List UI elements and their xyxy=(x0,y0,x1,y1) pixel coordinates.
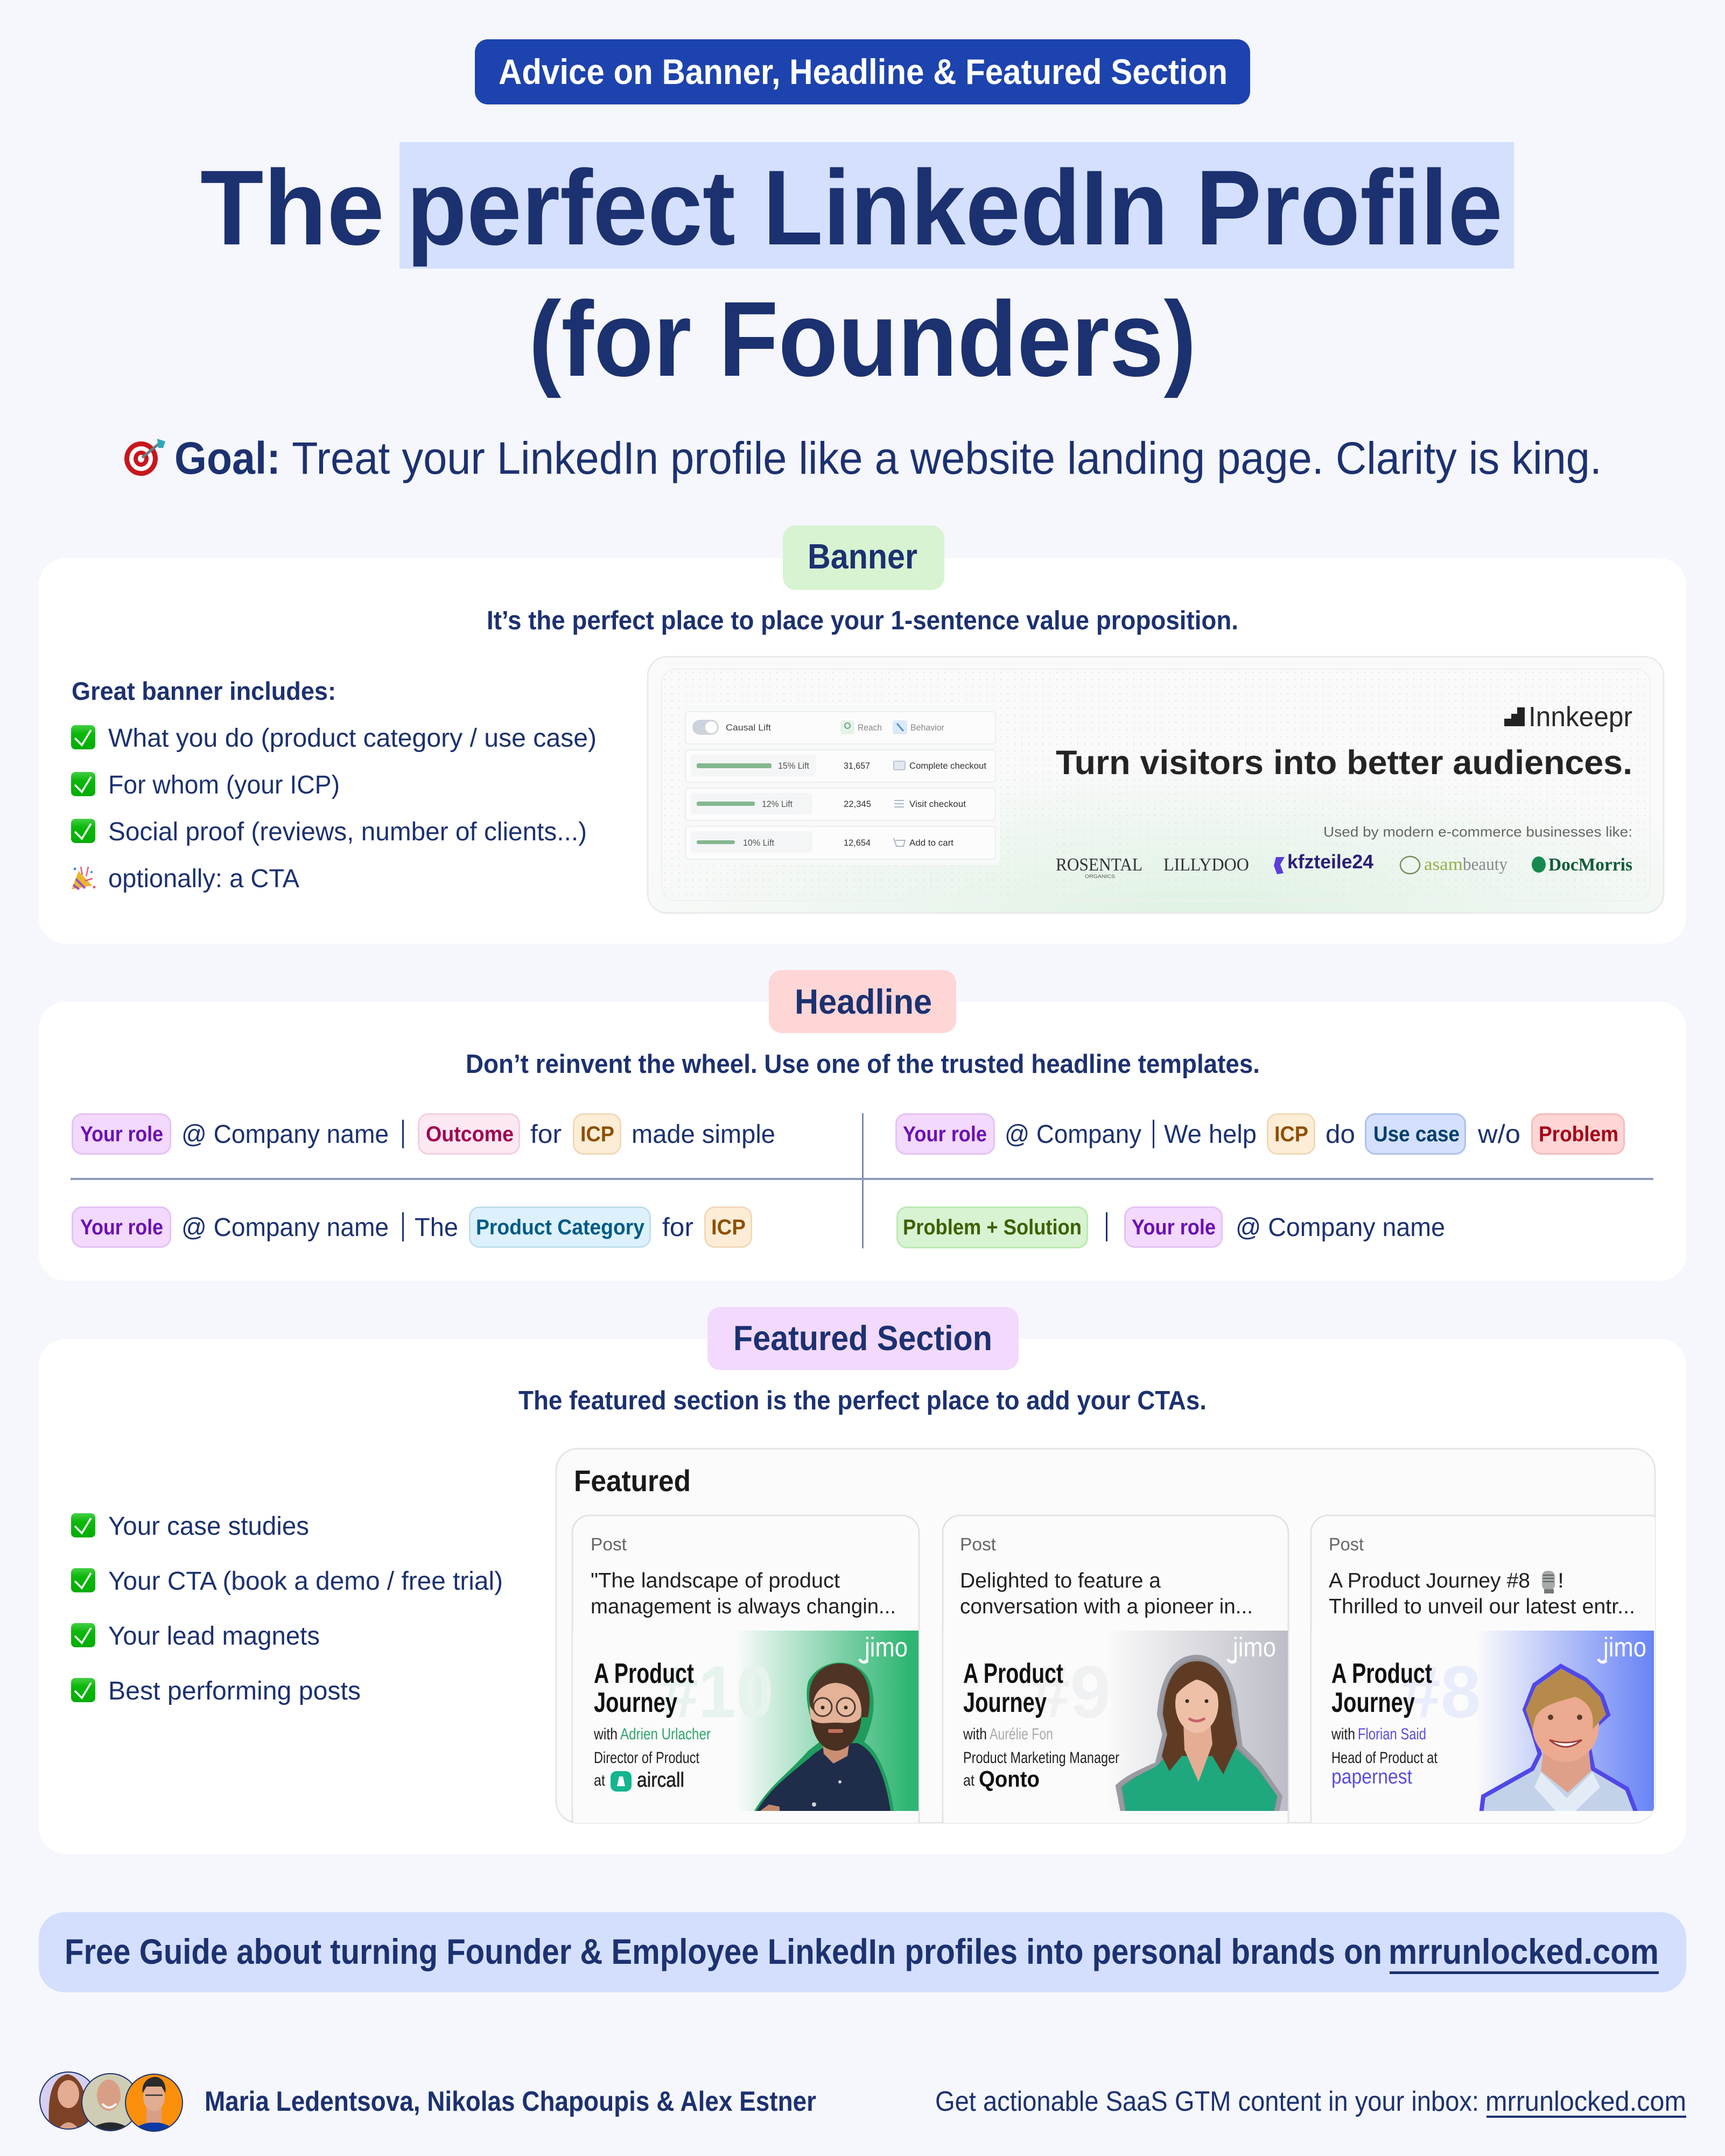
heading: headline xyxy=(769,970,956,1033)
post image 3 xyxy=(1312,1631,1654,1814)
template 2: We help xyxy=(1164,1120,1257,1149)
template 3 xyxy=(72,1207,752,1247)
footer xyxy=(38,2070,1686,2132)
call to action banner xyxy=(39,1912,1686,1992)
post image 2: Journey xyxy=(963,1687,1047,1718)
item: for whom: For whom (your ICP) xyxy=(108,771,340,799)
featured subtitle: The featured section is the perfect place to add your CTAs. xyxy=(518,1386,1207,1415)
table row: complete checkout xyxy=(685,750,995,782)
post image 1: Journey xyxy=(594,1687,677,1718)
portrait 1 xyxy=(755,1663,892,1814)
table row: visit checkout: Visit checkout xyxy=(909,799,966,809)
customer logos: kfzteile24 xyxy=(1287,851,1373,873)
post card 1: management is always changin... xyxy=(591,1595,896,1618)
aircall logo: aircall xyxy=(637,1769,684,1792)
post image 2: #9 xyxy=(1029,1651,1111,1733)
table row: add to cart: Add to cart xyxy=(909,838,953,848)
qonto logo: Qonto xyxy=(979,1766,1040,1792)
template 1: for xyxy=(530,1120,562,1149)
table header row: Causal Lift xyxy=(726,722,771,733)
heading: featured section: Featured Section xyxy=(733,1318,992,1358)
post card 3: A Product Journey #8 xyxy=(1329,1569,1530,1592)
template 3: The xyxy=(415,1213,458,1242)
post image 3: Journey xyxy=(1331,1687,1415,1718)
template 2: Your role xyxy=(903,1122,987,1146)
heading: featured section xyxy=(707,1307,1019,1370)
item: best posts: Best performing posts xyxy=(108,1677,361,1705)
icon: target with dart xyxy=(124,439,165,476)
post image 1: Adrien Urlacher xyxy=(620,1725,711,1743)
goal line xyxy=(124,433,1602,483)
call to action banner: Free Guide about turning Founder & Employee LinkedIn profiles into personal brands on xyxy=(65,1932,1382,1971)
goal sentence: Treat your LinkedIn profile like a website landing page. Clarity is king. xyxy=(292,433,1602,483)
title: The xyxy=(200,148,384,267)
social proof caption: Used by modern e-commerce businesses like: xyxy=(1323,824,1632,840)
template 3: ICP xyxy=(711,1216,746,1239)
template 2: @ Company xyxy=(1005,1120,1141,1149)
customer logos: ORGANICS xyxy=(1085,874,1115,879)
banner value proposition: Turn visitors into better audiences. xyxy=(1056,744,1632,782)
template 4: @ Company name xyxy=(1236,1213,1445,1242)
item: what you do: What you do (product category / use case) xyxy=(108,724,597,753)
table row: visit checkout xyxy=(685,788,995,820)
title xyxy=(200,142,1514,398)
post image 3: Florian Said xyxy=(1358,1725,1426,1743)
inbox call to action: Get actionable SaaS GTM content in your inbox: xyxy=(935,2086,1479,2117)
jimo logo 1 xyxy=(858,1637,907,1663)
template 1: Your role xyxy=(80,1122,163,1146)
checklist: featured xyxy=(71,1512,503,1705)
heading: banner: Banner xyxy=(808,537,917,576)
post card 3: Post xyxy=(1329,1534,1364,1554)
customer logos: asam xyxy=(1424,855,1463,874)
post image 3: with xyxy=(1331,1725,1355,1743)
template 1: made simple xyxy=(632,1120,775,1149)
post image 3: A Product xyxy=(1331,1658,1432,1689)
icon: microphone xyxy=(1542,1571,1555,1593)
jimo logo 1: jimo xyxy=(864,1632,908,1662)
post image 1: with xyxy=(593,1725,618,1743)
template 4 xyxy=(897,1207,1445,1248)
customer logos xyxy=(1056,851,1632,879)
checklist: banner xyxy=(71,677,597,893)
checklist: banner: Great banner includes: xyxy=(72,677,336,705)
table row: visit checkout: 22,345 xyxy=(844,799,871,809)
customer logos: DocMorris xyxy=(1548,855,1632,875)
aircall logo xyxy=(611,1771,684,1792)
table row: complete checkout: 31,657 xyxy=(844,761,870,771)
post card 2: Delighted to feature a xyxy=(960,1569,1161,1592)
jimo logo 2 xyxy=(1226,1637,1275,1663)
template 4: Problem + Solution xyxy=(903,1216,1082,1239)
avatar: Alex xyxy=(125,2074,183,2132)
template 2: ICP xyxy=(1274,1122,1308,1146)
post image 1: at xyxy=(594,1772,606,1789)
author avatars xyxy=(38,2070,183,2132)
post card 1: Post xyxy=(591,1534,627,1554)
heading: banner xyxy=(783,525,944,590)
table header row: Reach xyxy=(858,722,882,733)
title: (for Founders) xyxy=(529,279,1196,398)
top pill: subtitle: Advice on Banner, Headline & Featured Section xyxy=(499,52,1228,92)
post card 2: conversation with a pioneer in... xyxy=(960,1595,1253,1618)
headline subtitle: Don’t reinvent the wheel. Use one of the trusted headline templates. xyxy=(466,1050,1260,1079)
jimo logo 2: jimo xyxy=(1232,1632,1276,1662)
template 1: ICP xyxy=(580,1122,614,1146)
jimo logo 3: jimo xyxy=(1602,1632,1646,1662)
author names: Maria Ledentsova, Nikolas Chapoupis & Alex Estner xyxy=(205,2086,816,2117)
customer logos: ROSENTAL xyxy=(1056,855,1142,875)
template 2: do xyxy=(1326,1120,1355,1149)
title: perfect LinkedIn Profile xyxy=(406,148,1503,267)
post image 2: Product Marketing Manager xyxy=(963,1749,1119,1767)
post card 3: ! xyxy=(1558,1569,1564,1592)
item: optional cta: optionally: a CTA xyxy=(108,865,299,893)
item: social proof: Social proof (reviews, number of clients...) xyxy=(108,818,587,846)
template 2: Problem xyxy=(1539,1122,1618,1146)
post image 2: Aurélie Fon xyxy=(990,1725,1053,1743)
banner subtitle: It’s the perfect place to place your 1-sentence value proposition. xyxy=(487,606,1238,635)
table row: add to cart: 10% Lift xyxy=(743,838,774,848)
avatar: Maria xyxy=(38,2070,99,2132)
post image 2: A Product xyxy=(963,1658,1063,1689)
table row: add to cart: 12,654 xyxy=(844,838,871,848)
vertical divider xyxy=(862,1113,864,1248)
goal label: Goal: xyxy=(174,433,281,483)
item: lead magnets: Your lead magnets xyxy=(108,1622,320,1651)
table header row xyxy=(685,712,995,744)
post card 1 xyxy=(572,1515,919,1849)
table row: add to cart xyxy=(685,826,995,859)
post image 2: at xyxy=(963,1772,975,1789)
post image 1: Director of Product xyxy=(594,1749,700,1767)
portrait 2 xyxy=(1118,1657,1280,1814)
heading: headline: Headline xyxy=(795,982,932,1021)
avatar: Nikolas xyxy=(81,2073,140,2132)
post image 3: #8 xyxy=(1400,1651,1481,1733)
table header row: Behavior xyxy=(910,722,944,733)
table row: visit checkout: 12% Lift xyxy=(762,799,793,809)
papernest logo: papernest xyxy=(1331,1766,1412,1788)
portrait 3 xyxy=(1481,1666,1637,1814)
call to action banner: mrrunlocked.com xyxy=(1389,1932,1659,1971)
inbox call to action: mrrunlocked.com xyxy=(1485,2086,1686,2117)
post image 2: with xyxy=(963,1725,987,1743)
post image 1: #10 xyxy=(661,1651,774,1733)
post image 2 xyxy=(943,1631,1288,1814)
table mockup xyxy=(681,705,1000,865)
template 3: @ Company name xyxy=(181,1213,389,1242)
customer logos: LILLYDOO xyxy=(1163,855,1249,875)
item: cta: Your CTA (book a demo / free trial) xyxy=(108,1567,503,1596)
LinkedIn featured mockup xyxy=(556,1449,1666,1849)
banner image: Innkeepr xyxy=(648,657,1664,913)
template 3: Your role xyxy=(80,1216,163,1239)
table row: complete checkout: Complete checkout xyxy=(909,761,986,771)
panel: headline xyxy=(39,970,1686,1281)
item: case studies: Your case studies xyxy=(108,1512,309,1541)
template 2: Use case xyxy=(1373,1122,1460,1146)
LinkedIn featured mockup: Featured xyxy=(574,1464,691,1498)
table row: complete checkout: 15% Lift xyxy=(778,761,809,771)
post card 2 xyxy=(943,1515,1288,1849)
top pill: subtitle xyxy=(475,39,1250,104)
post card 2: Post xyxy=(960,1534,996,1554)
template 3: for xyxy=(662,1213,693,1242)
template 2: w/o xyxy=(1477,1120,1520,1149)
logo: Innkeepr: Innkeepr xyxy=(1528,701,1632,733)
template 1: Outcome xyxy=(426,1122,514,1146)
post card 3 xyxy=(1310,1515,1655,1823)
post card 1: "The landscape of product xyxy=(591,1569,840,1592)
panel: featured section xyxy=(39,1307,1686,1854)
post image 1: A Product xyxy=(594,1658,694,1689)
panel: banner xyxy=(39,525,1686,944)
template 1: @ Company name xyxy=(181,1120,389,1149)
template 2 xyxy=(896,1114,1624,1154)
post card 3: Thrilled to unveil our latest entr... xyxy=(1329,1595,1635,1618)
customer logos: beauty xyxy=(1463,855,1507,874)
template 4: Your role xyxy=(1132,1216,1216,1239)
template 1 xyxy=(72,1114,775,1154)
post image 3: Head of Product at xyxy=(1331,1749,1438,1767)
post image 1 xyxy=(573,1631,918,1814)
template 3: Product Category xyxy=(476,1216,645,1239)
horizontal divider xyxy=(71,1178,1653,1180)
